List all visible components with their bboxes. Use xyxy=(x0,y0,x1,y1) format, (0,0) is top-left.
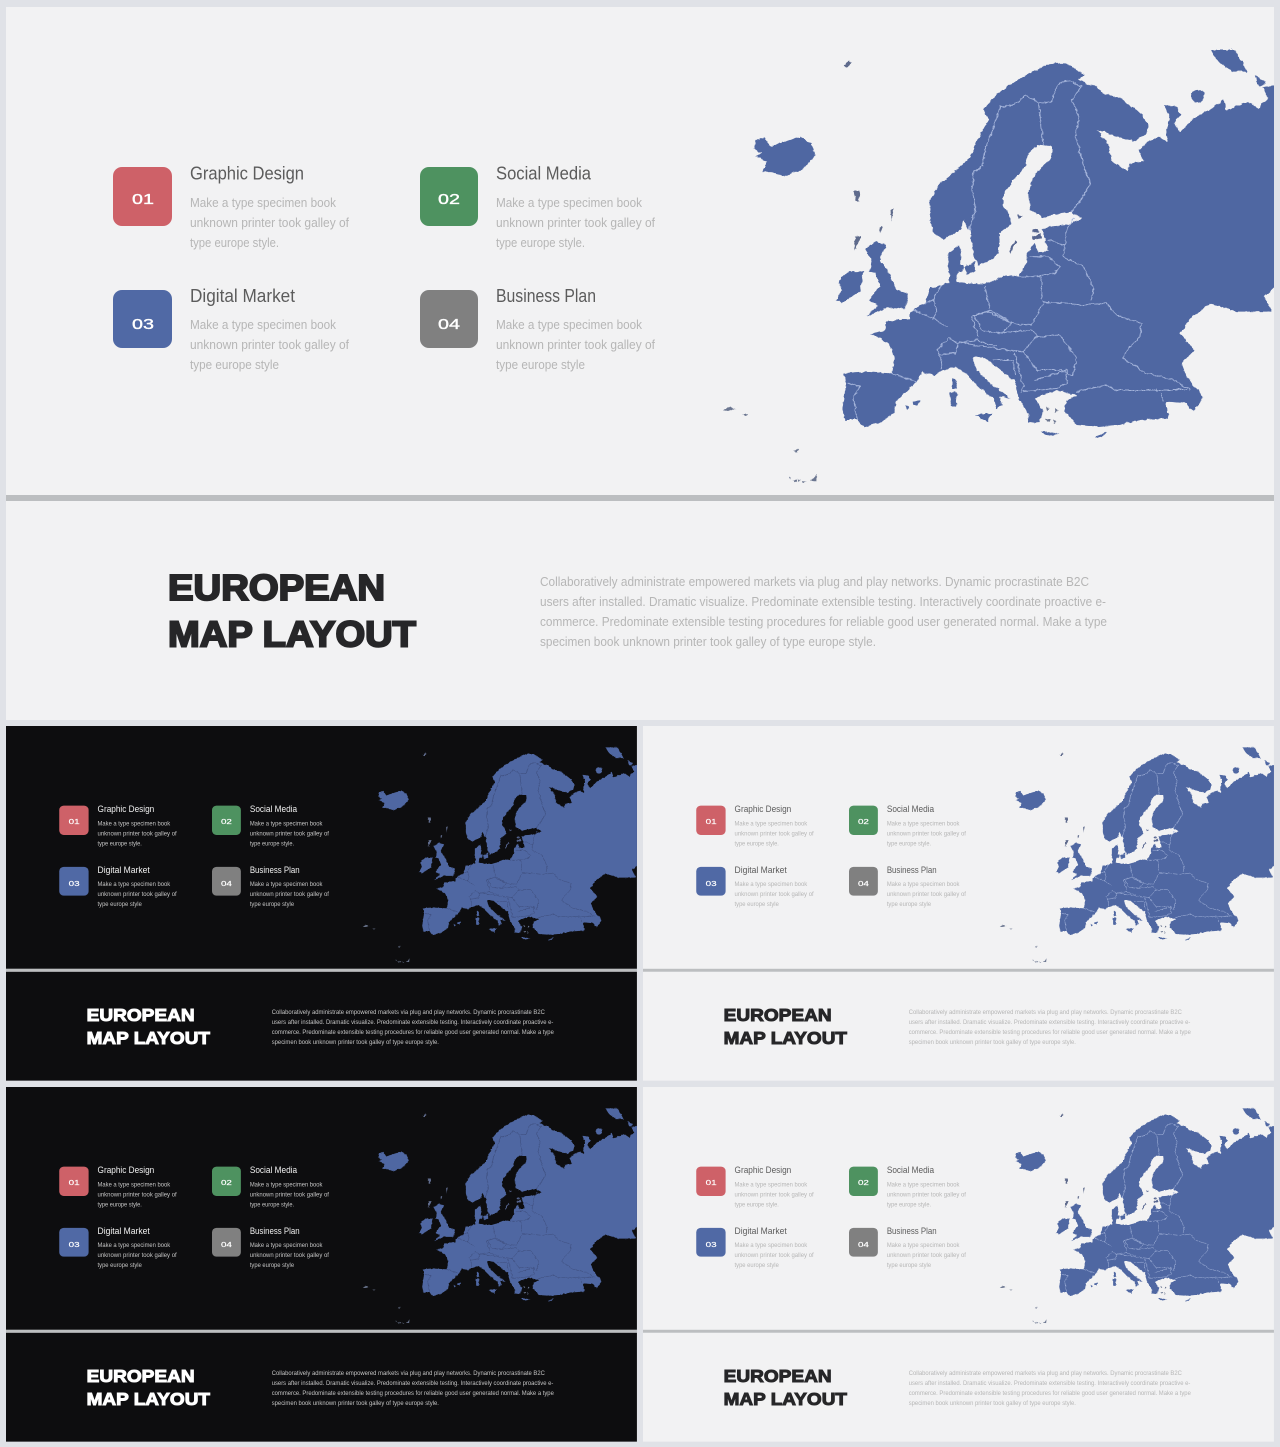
item 01: unknown printer took galley of xyxy=(735,830,814,837)
item 01: Graphic Design xyxy=(735,804,791,814)
item 02 xyxy=(212,1165,329,1208)
item 04 xyxy=(420,286,655,372)
divider strip xyxy=(643,969,1274,972)
item 03: Digital Market xyxy=(98,865,150,875)
panel: title section xyxy=(643,972,1274,1081)
item 01: type europe style. xyxy=(190,236,279,250)
paragraph: commerce. Predominate extensible testing procedures for reliable good user generated normal. Make a type xyxy=(272,1390,554,1397)
item 01: type europe style. xyxy=(735,840,779,847)
item 01: Make a type specimen book xyxy=(735,1182,808,1189)
item 01 xyxy=(696,1165,814,1208)
panel: title section xyxy=(6,1333,637,1442)
paragraph: users after installed. Dramatic visualize. Predominate extensible testing. Interactively coordinate proactive e- xyxy=(272,1019,553,1026)
item 04: 04 xyxy=(858,879,869,888)
divider strip xyxy=(643,1330,1274,1333)
paragraph: users after installed. Dramatic visualize. Predominate extensible testing. Interactively coordinate proactive e- xyxy=(540,595,1106,609)
item 03: 03 xyxy=(706,1240,717,1249)
item 02: type europe style. xyxy=(250,1201,294,1208)
title: EUROPEAN xyxy=(724,1366,832,1386)
item 01: unknown printer took galley of xyxy=(98,1191,177,1198)
item 02: Social Media xyxy=(250,1165,297,1175)
slide: large light xyxy=(6,7,1277,720)
item 01: unknown printer took galley of xyxy=(735,1191,814,1198)
item 02: unknown printer took galley of xyxy=(887,830,966,837)
item 01: 01 xyxy=(69,817,80,826)
title xyxy=(724,1366,847,1409)
item 03: unknown printer took galley of xyxy=(735,891,814,898)
item 01: Make a type specimen book xyxy=(190,196,337,210)
map: Europe xyxy=(1000,1108,1276,1324)
item 03 xyxy=(113,286,349,372)
item 03: type europe style xyxy=(190,358,279,372)
item 02: type europe style. xyxy=(250,840,294,847)
item 03: unknown printer took galley of xyxy=(98,1252,177,1259)
item 03: type europe style xyxy=(735,1262,779,1269)
panel: map section xyxy=(6,726,637,969)
item 03 xyxy=(696,1226,814,1269)
item 02: unknown printer took galley of xyxy=(887,1191,966,1198)
item 03: Make a type specimen book xyxy=(735,881,808,888)
paragraph: commerce. Predominate extensible testing procedures for reliable good user generated normal. Make a type xyxy=(272,1029,554,1036)
item 03: Make a type specimen book xyxy=(735,1242,808,1249)
item 01: type europe style. xyxy=(98,1201,142,1208)
item 04: type europe style xyxy=(250,901,295,908)
item 01: 01 xyxy=(706,817,717,826)
item 02 xyxy=(420,164,655,250)
title: MAP LAYOUT xyxy=(724,1028,847,1048)
divider strip xyxy=(6,1330,637,1333)
item 04: 04 xyxy=(221,1240,232,1249)
item 04: unknown printer took galley of xyxy=(250,891,329,898)
panel: title section xyxy=(6,972,637,1081)
item 03 xyxy=(59,865,177,908)
item 03: Make a type specimen book xyxy=(98,881,171,888)
paragraph: specimen book unknown printer took galley of type europe style. xyxy=(272,1039,439,1046)
item 03: type europe style xyxy=(98,1262,142,1269)
slide: small dark top xyxy=(6,726,639,1081)
item 02: 02 xyxy=(221,817,232,826)
paragraph: Collaboratively administrate empowered markets via plug and play networks. Dynamic procrastinate B2C xyxy=(909,1009,1182,1016)
panel: map section xyxy=(643,726,1274,969)
item 02: Make a type specimen book xyxy=(887,821,960,828)
item 04: type europe style xyxy=(887,1262,932,1269)
item 02: unknown printer took galley of xyxy=(250,830,329,837)
divider strip xyxy=(6,495,1274,501)
item 03: unknown printer took galley of xyxy=(735,1252,814,1259)
item 04: 04 xyxy=(858,1240,869,1249)
item 01 xyxy=(696,804,814,847)
item 04: type europe style xyxy=(496,358,585,372)
item 01: 01 xyxy=(132,191,154,208)
item 03: Digital Market xyxy=(190,286,295,306)
item 02: 02 xyxy=(221,1178,232,1187)
item 01: Make a type specimen book xyxy=(98,821,171,828)
item 01 xyxy=(59,1165,177,1208)
item 04: 04 xyxy=(438,316,460,333)
item 04 xyxy=(849,865,966,908)
title: EUROPEAN xyxy=(87,1366,195,1386)
paragraph: Collaboratively administrate empowered markets via plug and play networks. Dynamic procrastinate B2C xyxy=(909,1370,1182,1377)
item 04: Make a type specimen book xyxy=(887,1242,960,1249)
paragraph: commerce. Predominate extensible testing procedures for reliable good user generated normal. Make a type xyxy=(909,1029,1191,1036)
item 04 xyxy=(849,1226,966,1269)
item 03: Digital Market xyxy=(735,865,787,875)
title: MAP LAYOUT xyxy=(168,614,416,654)
item 02 xyxy=(849,804,966,847)
item 04: Make a type specimen book xyxy=(250,881,323,888)
paragraph: specimen book unknown printer took galley of type europe style. xyxy=(540,635,876,649)
item 02: unknown printer took galley of xyxy=(250,1191,329,1198)
paragraph xyxy=(909,1370,1191,1407)
panel: map section xyxy=(6,1087,637,1330)
item 03: 03 xyxy=(706,879,717,888)
title: MAP LAYOUT xyxy=(87,1389,210,1409)
item 02: type europe style. xyxy=(887,1201,931,1208)
item 02: Make a type specimen book xyxy=(250,1182,323,1189)
item 01: Graphic Design xyxy=(190,164,304,184)
item 03: 03 xyxy=(132,316,154,333)
paragraph: users after installed. Dramatic visualize. Predominate extensible testing. Interactively coordinate proactive e- xyxy=(272,1380,553,1387)
item 01: Make a type specimen book xyxy=(98,1182,171,1189)
paragraph: specimen book unknown printer took galley of type europe style. xyxy=(272,1400,439,1407)
item 04: unknown printer took galley of xyxy=(250,1252,329,1259)
item 02: Make a type specimen book xyxy=(887,1182,960,1189)
map: Europe xyxy=(1000,747,1276,963)
paragraph: specimen book unknown printer took galley of type europe style. xyxy=(909,1400,1076,1407)
title: MAP LAYOUT xyxy=(724,1389,847,1409)
item 04: type europe style xyxy=(887,901,932,908)
item 01: Graphic Design xyxy=(98,1165,154,1175)
map: Europe xyxy=(723,50,1277,483)
title: MAP LAYOUT xyxy=(87,1028,210,1048)
item 02: Social Media xyxy=(887,1165,934,1175)
paragraph xyxy=(272,1370,554,1407)
paragraph: users after installed. Dramatic visualize. Predominate extensible testing. Interactively coordinate proactive e- xyxy=(909,1380,1190,1387)
item 02: Social Media xyxy=(250,804,297,814)
item 04: Make a type specimen book xyxy=(887,881,960,888)
item 02: 02 xyxy=(858,1178,869,1187)
title: EUROPEAN xyxy=(87,1005,195,1025)
title xyxy=(170,574,417,648)
item 03: unknown printer took galley of xyxy=(190,338,349,352)
slide: small dark bottom xyxy=(6,1087,639,1442)
item 04 xyxy=(212,1226,329,1269)
item 02: 02 xyxy=(438,191,460,208)
paragraph: Collaboratively administrate empowered markets via plug and play networks. Dynamic procrastinate B2C xyxy=(540,575,1089,589)
item 04: Business Plan xyxy=(887,1226,937,1236)
title xyxy=(87,1366,210,1409)
item 04: Business Plan xyxy=(496,286,596,306)
slide: small light bottom xyxy=(643,1087,1276,1442)
item 03: Digital Market xyxy=(98,1226,150,1236)
title xyxy=(87,1008,210,1044)
panel: map section xyxy=(643,1087,1274,1330)
item 01: 01 xyxy=(69,1178,80,1187)
item 01: type europe style. xyxy=(98,840,142,847)
item 04: unknown printer took galley of xyxy=(887,891,966,898)
item 04 xyxy=(212,865,329,908)
item 02 xyxy=(849,1165,966,1208)
title: EUROPEAN xyxy=(168,567,385,608)
item 01: Graphic Design xyxy=(98,804,154,814)
item 04: Make a type specimen book xyxy=(496,318,643,332)
item 04: Business Plan xyxy=(250,865,300,875)
item 01: unknown printer took galley of xyxy=(98,830,177,837)
map: Europe xyxy=(363,1108,639,1324)
paragraph xyxy=(272,1009,554,1046)
item 03: type europe style xyxy=(735,901,779,908)
item 01: 01 xyxy=(706,1178,717,1187)
item 02: 02 xyxy=(858,817,869,826)
paragraph: commerce. Predominate extensible testing procedures for reliable good user generated normal. Make a type xyxy=(540,615,1107,629)
paragraph xyxy=(909,1009,1191,1046)
item 04: Business Plan xyxy=(250,1226,300,1236)
item 03: 03 xyxy=(69,1240,80,1249)
paragraph: Collaboratively administrate empowered markets via plug and play networks. Dynamic procrastinate B2C xyxy=(272,1009,545,1016)
paragraph xyxy=(540,575,1107,649)
paragraph: Collaboratively administrate empowered markets via plug and play networks. Dynamic procrastinate B2C xyxy=(272,1370,545,1377)
item 01: type europe style. xyxy=(735,1201,779,1208)
item 03 xyxy=(59,1226,177,1269)
item 04: unknown printer took galley of xyxy=(887,1252,966,1259)
item 02: Social Media xyxy=(887,804,934,814)
item 02: Social Media xyxy=(496,164,592,184)
item 04: Make a type specimen book xyxy=(250,1242,323,1249)
item 04: Business Plan xyxy=(887,865,937,875)
paragraph: specimen book unknown printer took galley of type europe style. xyxy=(909,1039,1076,1046)
panel: title section xyxy=(6,501,1274,720)
panel: map section xyxy=(6,7,1274,495)
item 02: type europe style. xyxy=(496,236,585,250)
item 02: unknown printer took galley of xyxy=(496,216,655,230)
paragraph: users after installed. Dramatic visualize. Predominate extensible testing. Interactively coordinate proactive e- xyxy=(909,1019,1190,1026)
map: Europe xyxy=(363,747,639,963)
item 01: unknown printer took galley of xyxy=(190,216,349,230)
item 01: Make a type specimen book xyxy=(735,821,808,828)
item 03: type europe style xyxy=(98,901,142,908)
item 02: Make a type specimen book xyxy=(496,196,643,210)
item 03: Make a type specimen book xyxy=(190,318,337,332)
item 04: unknown printer took galley of xyxy=(496,338,655,352)
item 04: 04 xyxy=(221,879,232,888)
slide: small light top xyxy=(643,726,1276,1081)
item 02: Make a type specimen book xyxy=(250,821,323,828)
item 01 xyxy=(59,804,177,847)
item 02 xyxy=(212,804,329,847)
title: EUROPEAN xyxy=(724,1005,832,1025)
item 03: Digital Market xyxy=(735,1226,787,1236)
item 01 xyxy=(113,164,349,250)
item 03: Make a type specimen book xyxy=(98,1242,171,1249)
item 03: 03 xyxy=(69,879,80,888)
divider strip xyxy=(6,969,637,972)
item 03 xyxy=(696,865,814,908)
item 02: type europe style. xyxy=(887,840,931,847)
panel: title section xyxy=(643,1333,1274,1442)
paragraph: commerce. Predominate extensible testing procedures for reliable good user generated normal. Make a type xyxy=(909,1390,1191,1397)
title xyxy=(724,1008,848,1044)
item 03: unknown printer took galley of xyxy=(98,891,177,898)
item 01: Graphic Design xyxy=(735,1165,791,1175)
item 04: type europe style xyxy=(250,1262,295,1269)
